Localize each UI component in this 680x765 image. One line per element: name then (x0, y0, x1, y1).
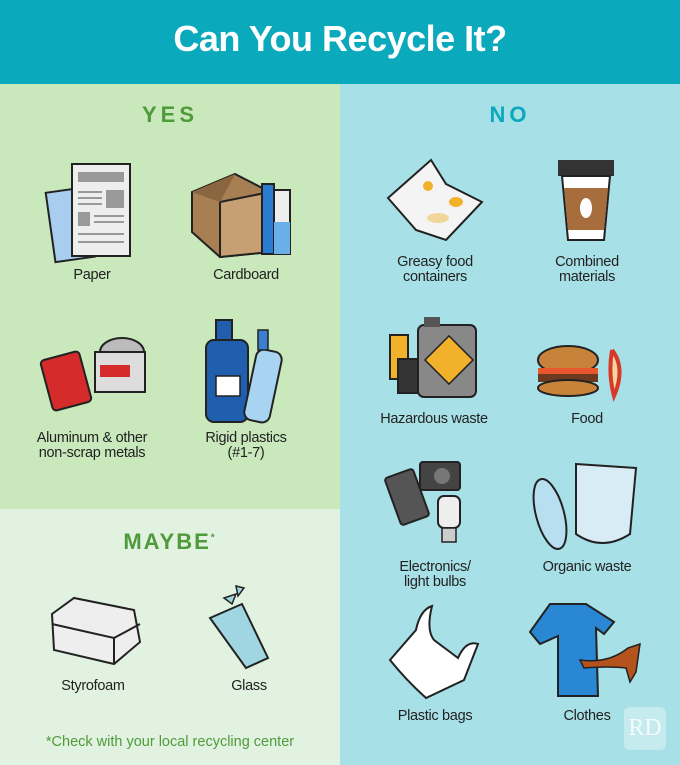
label: greasy (397, 254, 473, 285)
label: styrofoam: Styrofoam (61, 678, 125, 694)
logo: RD (624, 707, 666, 750)
label: hazardous: Hazardous waste (380, 411, 488, 427)
label: plastics: (#1-7) (228, 445, 264, 461)
icon: plastic bag (388, 604, 480, 700)
icon: coffee cup (558, 160, 614, 241)
panel: yes (0, 84, 340, 509)
icon: hazardous (389, 317, 477, 398)
heading: no: NO (490, 102, 530, 127)
label: combined: materials (559, 269, 615, 285)
label: electronics (399, 559, 471, 590)
label: plastic bags: Plastic bags (398, 708, 472, 724)
icon: plastics (205, 319, 283, 424)
label: plastics (205, 430, 287, 461)
label: electronics: Electronics/ (399, 559, 471, 575)
header (0, 0, 680, 84)
icon: electronics (384, 461, 461, 543)
icon: metals (40, 337, 146, 412)
label: organic: Organic waste (543, 559, 631, 575)
icon: greasy container (386, 158, 484, 242)
panel: maybe (0, 509, 340, 765)
label: metals (36, 430, 148, 461)
icon: glass (208, 585, 270, 670)
label: greasy: containers (403, 269, 467, 285)
title: Can You Recycle It? (173, 18, 507, 59)
label: clothes: Clothes (563, 708, 611, 724)
icon: styrofoam (51, 596, 142, 666)
label: electronics: light bulbs (404, 574, 466, 590)
label: plastics: Rigid plastics (205, 430, 287, 446)
label: paper: Paper (73, 267, 111, 283)
label: metals: Aluminum & other (37, 430, 147, 446)
label: combined: Combined (555, 254, 619, 270)
icon: paper (44, 163, 131, 264)
label: combined (555, 254, 619, 285)
logo: RD: RD (628, 715, 662, 741)
icon: cardboard (191, 172, 291, 258)
icon: organic waste (532, 462, 638, 550)
label: cardboard: Cardboard (213, 267, 279, 283)
heading: yes: YES (142, 102, 198, 127)
icon: clothes (528, 603, 641, 697)
heading: maybe: MAYBE* (123, 529, 217, 554)
label: food: Food (571, 411, 603, 427)
panel: no (340, 84, 680, 765)
footnote: *Check with your local recycling center (46, 734, 294, 750)
icon: food (537, 345, 622, 402)
label: glass: Glass (231, 678, 267, 694)
label: metals: non-scrap metals (39, 445, 145, 461)
label: greasy: Greasy food (397, 254, 473, 270)
